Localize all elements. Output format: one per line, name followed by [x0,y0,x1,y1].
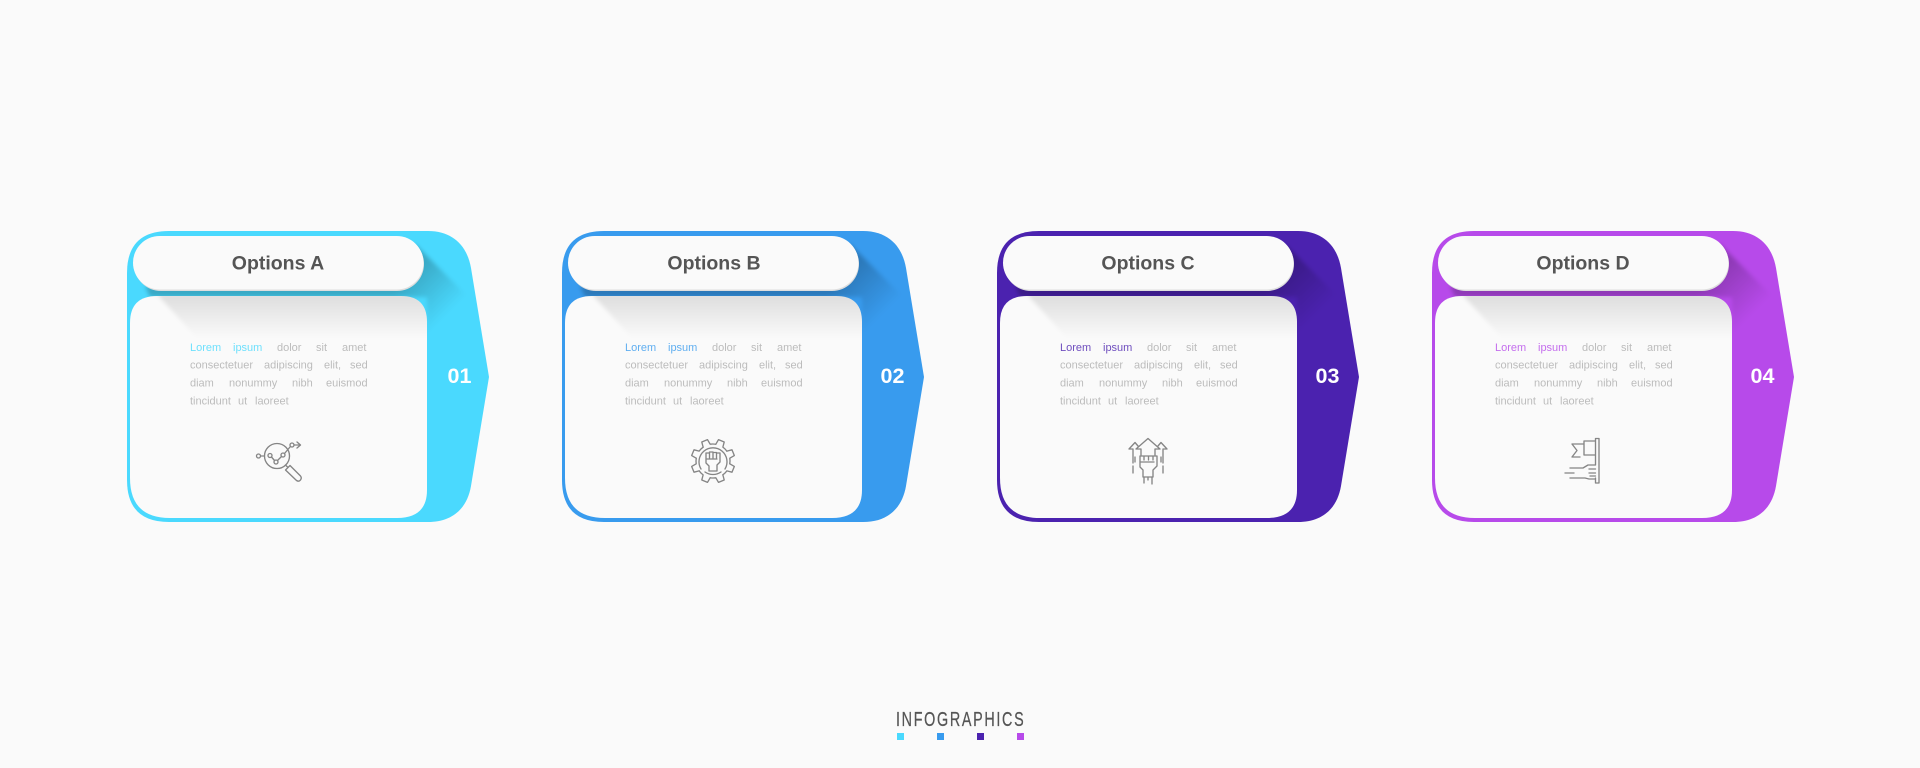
body text: nonummy [664,378,713,390]
body text: sit [1186,342,1197,354]
body text: nibh [727,378,748,390]
body text: euismod [761,378,803,390]
body text: sed [785,360,803,372]
body text: ipsum [233,342,262,354]
body text: Lorem [1495,342,1526,354]
body text: laoreet [255,396,289,408]
body text: consectetuer [1495,360,1558,372]
body text: ut [238,396,247,408]
body text: laoreet [1125,396,1159,408]
body shadow [1028,296,1297,326]
heading: Options A [232,252,324,274]
number: 02 [881,364,904,388]
body text: sed [350,360,368,372]
body text: nonummy [229,378,278,390]
body text: laoreet [690,396,724,408]
panel: Options C [997,231,1360,522]
body text: adipiscing [1569,360,1618,372]
body text: Lorem [625,342,656,354]
body text: diam [625,378,649,390]
body text: ut [1543,396,1552,408]
body text [1495,342,1673,408]
body text: elit, [324,360,341,372]
body text: consectetuer [1060,360,1123,372]
heading: Options C [1101,252,1195,274]
body text: sed [1655,360,1673,372]
body text: ut [1108,396,1117,408]
body panel [130,296,427,518]
icon: fist with arrows [1129,438,1167,484]
body text: elit, [759,360,776,372]
header pill [1438,236,1729,291]
panel: Options D [1432,231,1795,522]
body text: sit [316,342,327,354]
body text: dolor [712,342,737,354]
body text: dolor [1147,342,1172,354]
arrow card shape [127,231,489,522]
body text: euismod [1196,378,1238,390]
body text: elit, [1629,360,1646,372]
pill long shadow [144,244,458,319]
logo: INFOGRAPHICS wordmark [896,707,1025,740]
panel: Options B [562,231,925,522]
body text: adipiscing [699,360,748,372]
body text: sed [1220,360,1238,372]
body text: tincidunt [625,396,666,408]
number: 03 [1316,364,1339,388]
body text: dolor [277,342,302,354]
body text [1060,342,1238,408]
body text: tincidunt [190,396,231,408]
body text: diam [1060,378,1084,390]
body text [190,342,368,408]
body text: ipsum [1538,342,1567,354]
body text: Lorem [190,342,221,354]
body text: nonummy [1534,378,1583,390]
heading: Options D [1536,252,1630,274]
body panel [1435,296,1732,518]
body text: euismod [1631,378,1673,390]
body text: amet [1212,342,1236,354]
body text: amet [777,342,801,354]
icon: gear with fist [689,437,737,485]
body text: ut [673,396,682,408]
body text: sit [751,342,762,354]
header pill [133,236,424,291]
body text: euismod [326,378,368,390]
body text: amet [342,342,366,354]
arrow card shape [997,231,1359,522]
pill long shadow [1450,244,1762,318]
body text: diam [1495,378,1519,390]
body text: amet [1647,342,1671,354]
arrow card shape [1432,231,1794,522]
heading: Options B [667,252,761,274]
body text: laoreet [1560,396,1594,408]
body text: sit [1621,342,1632,354]
body text: nibh [1597,378,1618,390]
body text: dolor [1582,342,1607,354]
body text: ipsum [1103,342,1132,354]
body text: adipiscing [1134,360,1183,372]
body text: Lorem [1060,342,1091,354]
body shadow [158,296,427,326]
body text: diam [190,378,214,390]
body text: adipiscing [264,360,313,372]
header pill [568,236,859,291]
arrow card shape [562,231,924,522]
body text: consectetuer [190,360,253,372]
body shadow [592,296,862,326]
number: 04 [1751,364,1774,388]
body text: tincidunt [1495,396,1536,408]
body panel [1000,296,1297,518]
icon: magnifier with chart [256,442,301,481]
header pill [1003,236,1294,291]
body shadow [1462,296,1732,326]
wordmark text: INFOGRAPHICS [896,707,1025,731]
body text: nibh [1162,378,1183,390]
body text: tincidunt [1060,396,1101,408]
body text: consectetuer [625,360,688,372]
body text: elit, [1194,360,1211,372]
icon: hand holding flag [1565,438,1599,483]
pill long shadow [580,244,892,318]
pill long shadow [1015,244,1325,314]
body text [625,342,803,408]
body text: nibh [292,378,313,390]
panel: Options A [127,231,490,522]
body text: nonummy [1099,378,1148,390]
body text: ipsum [668,342,697,354]
number: 01 [448,364,471,388]
body panel [565,296,862,518]
legend squares [897,733,1024,740]
